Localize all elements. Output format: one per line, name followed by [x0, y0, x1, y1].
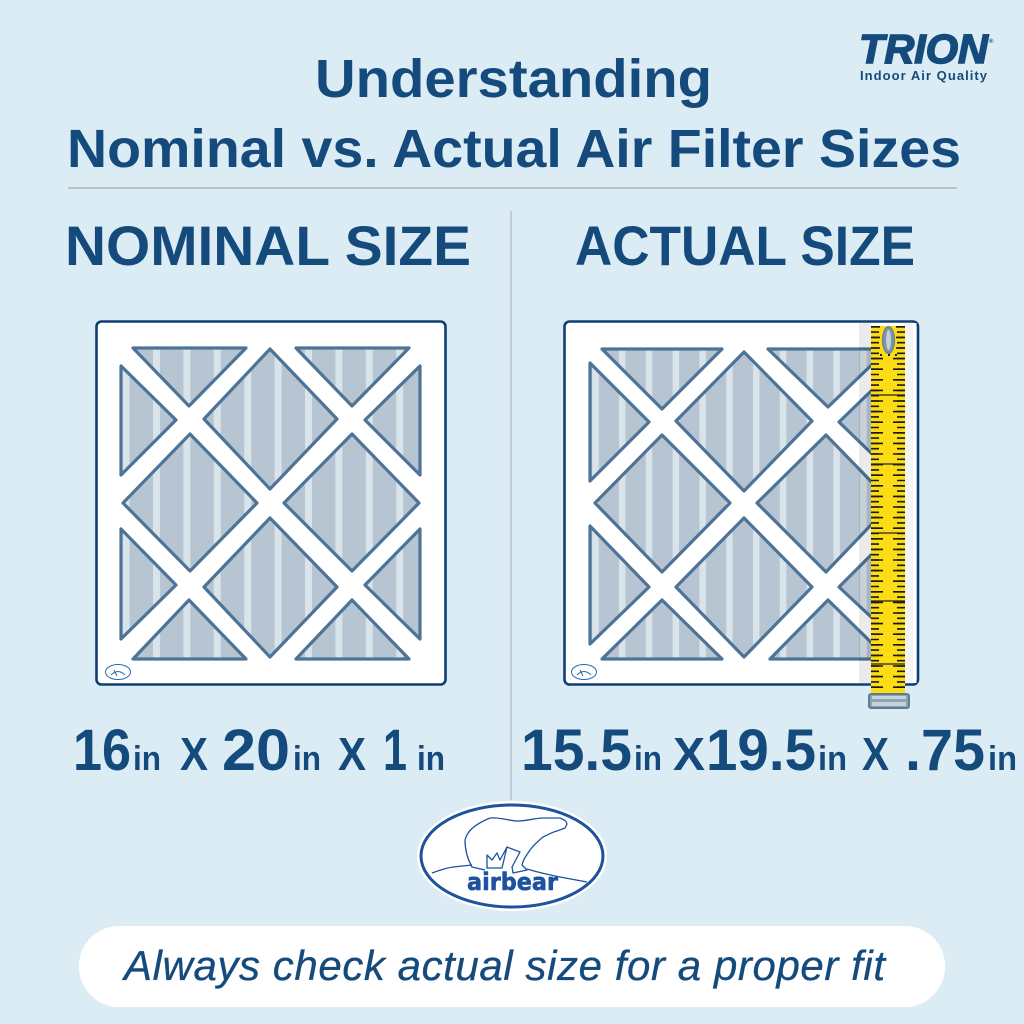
actual dimensions: 15.5 [521, 718, 632, 783]
actual dimensions: .75 [905, 718, 985, 783]
panel: actual filter with tape [564, 322, 918, 708]
nominal dimensions: 20 [222, 718, 290, 783]
actual dimensions: X [673, 728, 705, 780]
logo: airbear: airbear [467, 868, 558, 896]
nominal dimensions: 1 [383, 718, 407, 783]
icon: mini airbear logo [572, 664, 596, 680]
measuring tape [859, 323, 916, 708]
nominal dimensions: 16 [73, 718, 131, 783]
actual dimensions: 19.5 [706, 718, 816, 783]
actual dimensions: in [634, 740, 662, 778]
nominal dimensions: X [180, 728, 208, 780]
nominal dimensions: in [293, 740, 321, 778]
panel: nominal filter [96, 322, 446, 684]
icon: mini airbear logo [106, 664, 130, 680]
actual dimensions: X [862, 728, 889, 780]
nominal dimensions: in [417, 740, 445, 778]
tape end clip [869, 694, 909, 708]
callout: fit reminder: Always check actual size for a proper fit [121, 942, 887, 989]
actual dimensions: in [988, 740, 1017, 778]
logo: Trion: TRION [859, 26, 989, 72]
actual dimensions: in [818, 740, 847, 778]
title [67, 49, 961, 179]
logo: Trion: ® [989, 38, 994, 45]
nominal dimensions: X [338, 728, 366, 780]
logo: airbear [417, 801, 607, 911]
title: Nominal vs. Actual Air Filter Sizes [67, 119, 961, 179]
nominal dimensions: in [133, 740, 161, 778]
heading: actual size: ACTUAL SIZE [575, 214, 915, 277]
icon: polar bear [432, 818, 587, 882]
heading: nominal size: NOMINAL SIZE [65, 214, 471, 277]
actual dimensions [521, 718, 1017, 783]
nominal dimensions [73, 718, 445, 783]
title: Understanding [315, 49, 712, 109]
logo: Trion: Indoor Air Quality [860, 68, 988, 83]
callout: fit reminder [79, 926, 945, 1007]
